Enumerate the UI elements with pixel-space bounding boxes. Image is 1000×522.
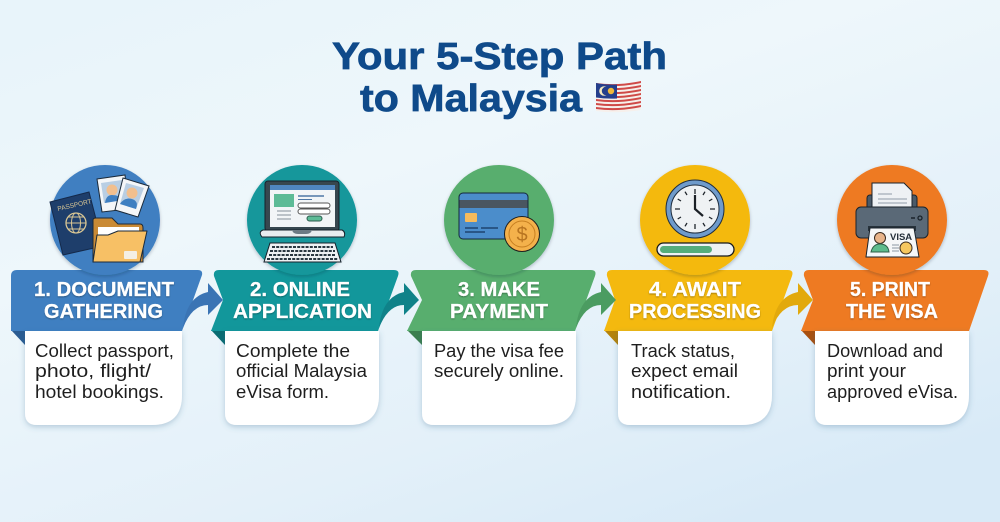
arrow: step 2 to step 3 xyxy=(379,283,419,328)
banner: 1. DOCUMENT xyxy=(34,279,174,301)
card: photo, flight/ xyxy=(35,361,151,381)
card: official Malaysia xyxy=(236,361,368,381)
icon: passport, photos and folder: PASSPORT xyxy=(57,198,92,213)
card: securely online. xyxy=(434,361,564,381)
title: to Malaysia xyxy=(360,78,583,120)
card xyxy=(815,331,969,425)
banner: 2. ONLINE xyxy=(250,279,350,301)
icon: clock and progress bar xyxy=(640,165,750,275)
card xyxy=(618,331,772,425)
title: Your 5-Step Path xyxy=(332,36,667,78)
card: eVisa form. xyxy=(236,382,329,402)
icon: passport, photos and folder xyxy=(50,165,160,275)
banner: GATHERING xyxy=(44,301,163,323)
icon: laptop xyxy=(247,165,357,275)
banner: 4. AWAIT xyxy=(649,279,741,301)
banner: PAYMENT xyxy=(450,301,548,323)
title xyxy=(332,36,667,120)
icon: printer and visa xyxy=(837,165,947,275)
banner: PROCESSING xyxy=(629,301,761,323)
card: Download and xyxy=(827,341,943,361)
fold xyxy=(11,330,25,345)
banner xyxy=(211,270,398,331)
icon: Malaysian flag xyxy=(596,81,641,112)
banner: THE VISA xyxy=(846,301,938,323)
banner: 3. MAKE xyxy=(458,279,540,301)
step 2: online application xyxy=(211,165,398,425)
card: Pay the visa fee xyxy=(434,341,564,361)
fold xyxy=(604,330,618,345)
card: print your xyxy=(827,361,906,381)
fold xyxy=(407,330,422,345)
banner xyxy=(407,270,596,331)
icon: credit card and coin: $ xyxy=(516,224,528,246)
arrow: step 1 to step 2 xyxy=(183,283,223,328)
step 3: make payment xyxy=(407,165,596,425)
step 5: print the visa xyxy=(801,165,988,425)
banner: 5. PRINT xyxy=(850,279,930,301)
step 4: await processing xyxy=(604,165,792,425)
card: approved eVisa. xyxy=(827,382,958,402)
card: Track status, xyxy=(631,341,735,361)
card: expect email xyxy=(631,361,738,381)
card: hotel bookings. xyxy=(35,382,164,402)
card: Complete the xyxy=(236,341,350,361)
step 1: document gathering xyxy=(11,165,202,425)
banner xyxy=(11,270,202,331)
arrow: step 3 to step 4 xyxy=(576,283,616,328)
fold xyxy=(801,330,815,345)
card: notification. xyxy=(631,382,731,402)
card: Collect passport, xyxy=(35,341,174,361)
fold xyxy=(211,330,225,345)
banner: APPLICATION xyxy=(233,301,372,323)
card xyxy=(25,331,182,425)
banner xyxy=(604,270,792,331)
card xyxy=(422,331,576,425)
card xyxy=(225,331,379,425)
icon: credit card and coin xyxy=(444,165,554,275)
banner xyxy=(801,270,988,331)
icon: printer and visa: VISA xyxy=(890,232,912,243)
arrow: step 4 to step 5 xyxy=(772,283,813,328)
